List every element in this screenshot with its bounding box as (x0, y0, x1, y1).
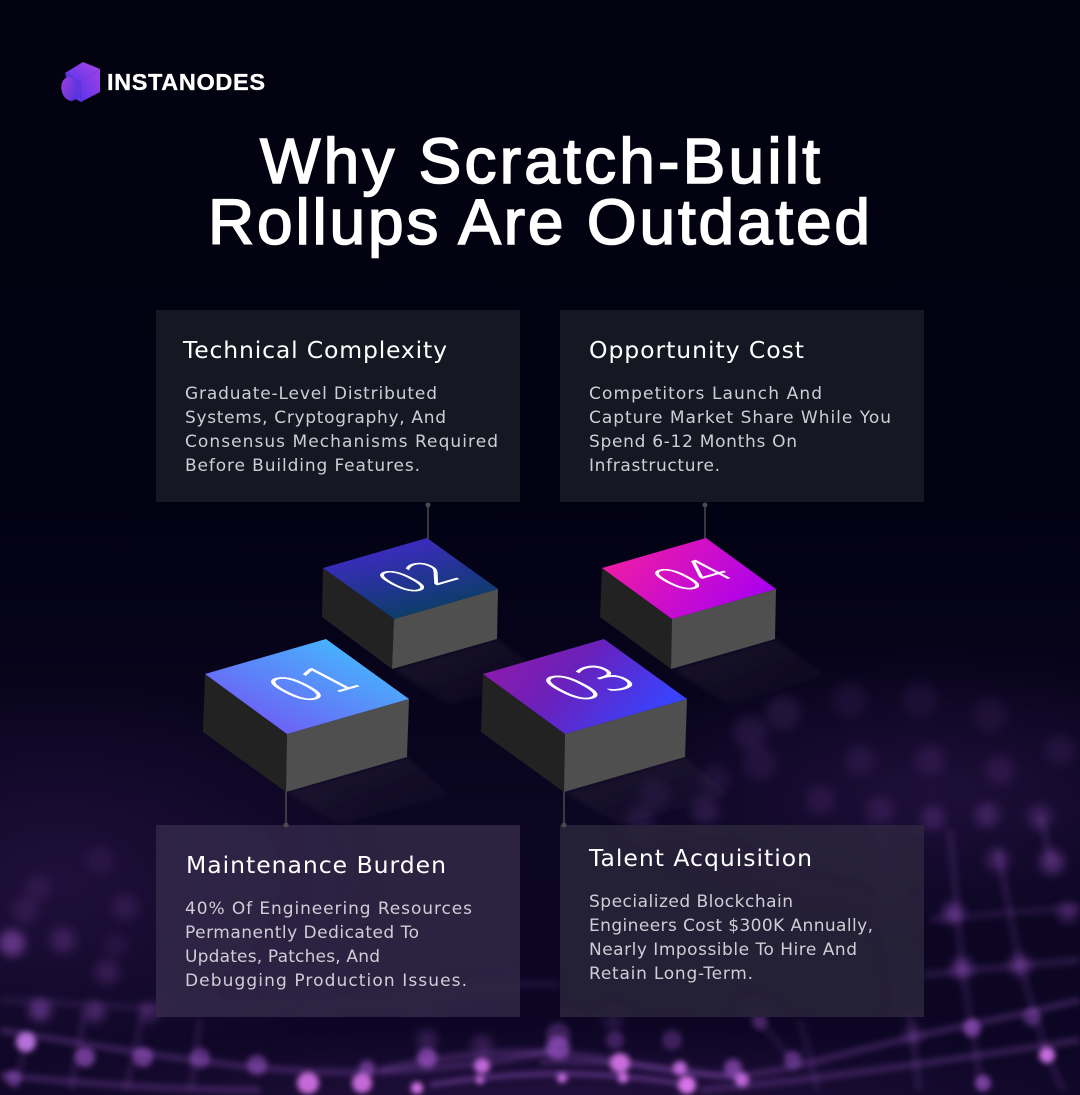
heading: talent acquisition: Talent Acquisition (588, 844, 812, 872)
heading: technical complexity: Technical Complexity (182, 336, 447, 364)
text: opportunity cost body: Capture Market Share While You (589, 408, 891, 428)
text: maintenance burden body: Debugging Production Issues. (185, 971, 467, 991)
title: Rollups Are Outdated (208, 186, 870, 258)
text: talent acquisition body (589, 892, 873, 984)
connector: 04 to opportunity cost (702, 502, 708, 539)
text: technical complexity body: Consensus Mechanisms Required (185, 432, 498, 452)
text: opportunity cost body (589, 384, 891, 476)
text: talent acquisition body: Specialized Blockchain (589, 892, 793, 912)
bright dots (5, 1008, 1055, 1094)
number 02: 02 (361, 555, 474, 600)
text: talent acquisition body: Engineers Cost $300K Annually, (589, 916, 873, 936)
number 04: 04 (636, 553, 749, 598)
text: opportunity cost body: Competitors Launch And (589, 384, 822, 404)
block 02 (322, 538, 545, 705)
text: maintenance burden body: Permanently Dedicated To (185, 923, 419, 943)
panel: technical complexity (156, 310, 520, 502)
connector: 03 to talent acquisition (562, 790, 566, 828)
heading: opportunity cost: Opportunity Cost (589, 336, 804, 364)
panel: maintenance burden (156, 825, 520, 1017)
logo wordmark: INSTANODES (107, 69, 265, 95)
panel: talent acquisition (560, 825, 924, 1017)
connector: 01 to maintenance burden (284, 790, 288, 828)
text: opportunity cost body: Infrastructure. (589, 456, 720, 476)
title: Why Scratch-Built (260, 125, 820, 197)
text: talent acquisition body: Nearly Impossible To Hire And (589, 940, 857, 960)
faint soft dots (0, 683, 1078, 1055)
panel: opportunity cost (560, 310, 924, 502)
text: maintenance burden body (185, 899, 472, 991)
text: maintenance burden body: 40% Of Engineering Resources (185, 899, 472, 919)
heading: maintenance burden: Maintenance Burden (186, 851, 446, 879)
number 03: 03 (524, 656, 656, 710)
block 04 (600, 538, 825, 705)
text: technical complexity body: Systems, Cryptography, And (185, 408, 446, 428)
text: maintenance burden body: Updates, Patches, And (185, 947, 380, 967)
block 03 (481, 639, 730, 825)
text: technical complexity body (185, 384, 498, 476)
text: talent acquisition body: Retain Long-Term. (589, 964, 753, 984)
icon: cube logo (59, 62, 100, 103)
logo: Instanodes (59, 62, 265, 103)
text: technical complexity body: Graduate-Level Distributed (185, 384, 437, 404)
number 01: 01 (251, 659, 378, 710)
text: technical complexity body: Before Building Features. (185, 456, 420, 476)
text: opportunity cost body: Spend 6-12 Months On (589, 432, 797, 452)
block 01 (203, 639, 450, 825)
background: glowing purple network mesh (0, 650, 1080, 1095)
title (208, 125, 870, 258)
connector: 02 to technical complexity (426, 502, 430, 539)
